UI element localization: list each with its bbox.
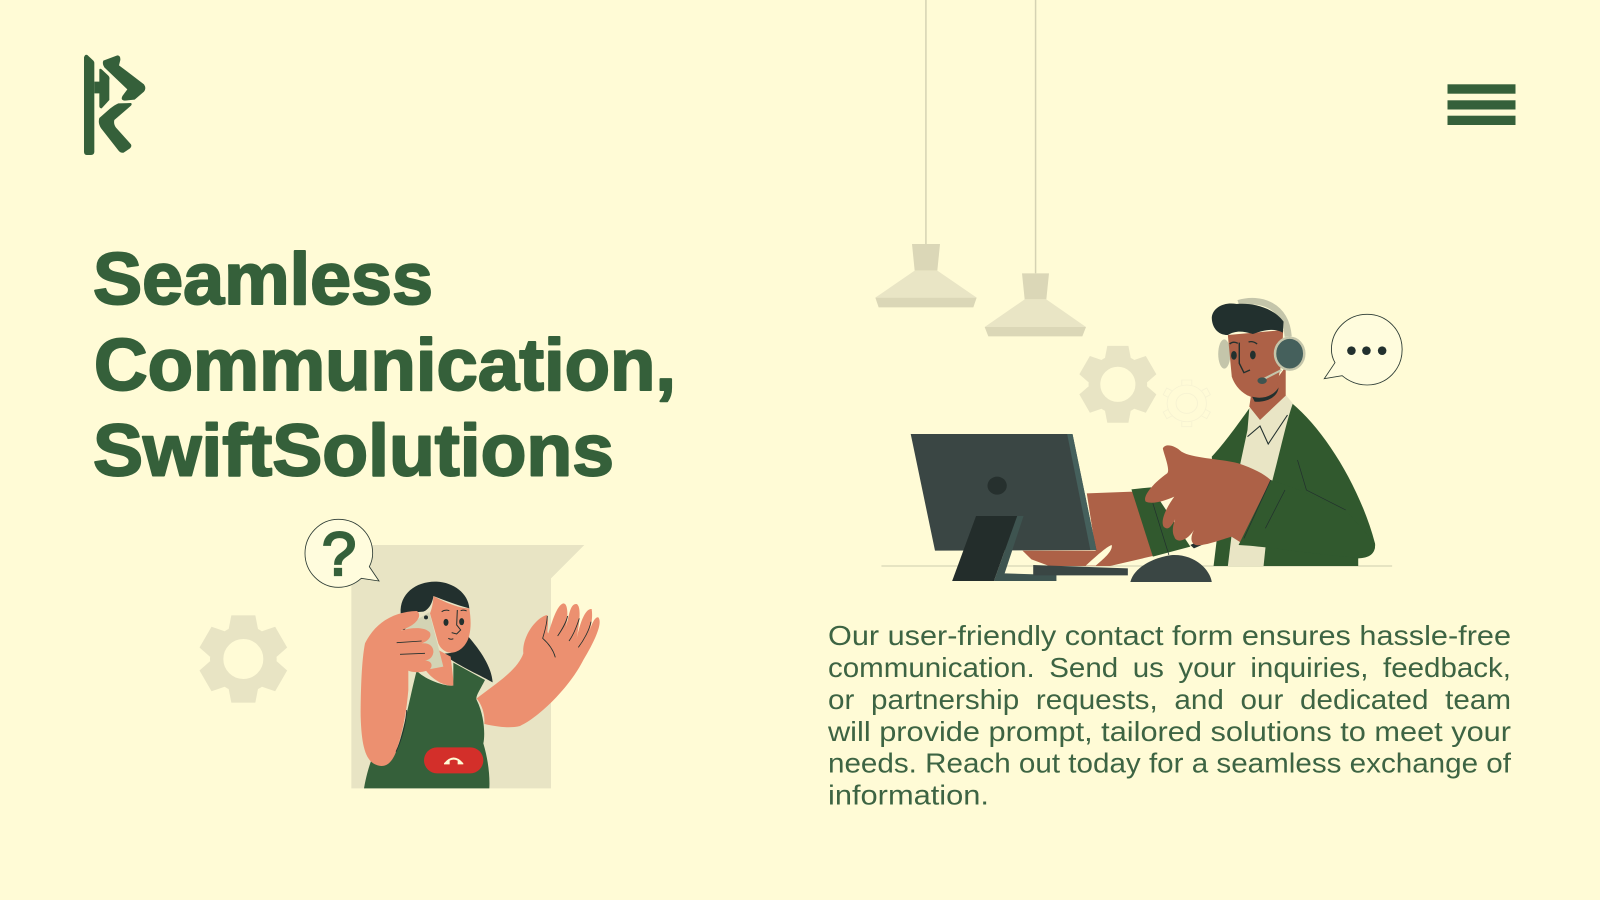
illustration: support agent at computer — [881, 301, 1402, 582]
illustration: woman on phone — [198, 519, 600, 788]
face details — [442, 610, 467, 639]
window panel — [351, 545, 584, 788]
near arm and hand — [1145, 445, 1271, 545]
collar lines — [1247, 415, 1287, 444]
title: SwiftSolutions — [93, 410, 614, 492]
speech bubble with question mark: ? — [322, 520, 356, 589]
finger lines — [396, 641, 425, 752]
title: Seamless — [93, 239, 433, 320]
woman hair — [401, 582, 469, 613]
palm lines — [543, 616, 591, 657]
woman face — [430, 596, 471, 653]
mouse — [1130, 555, 1212, 582]
headset band — [1239, 301, 1288, 337]
monitor stand — [952, 516, 1056, 581]
woman dress — [364, 663, 489, 788]
body text — [827, 620, 1511, 810]
woman left arm and hand — [361, 611, 433, 766]
woman hair back — [442, 637, 493, 682]
lamp left — [875, 0, 977, 307]
body text: communication. Send us your inquiries, feedback, — [828, 652, 1511, 683]
body text: information. — [828, 780, 989, 810]
agent hair — [1212, 303, 1284, 335]
logo — [84, 55, 145, 155]
face details — [1230, 342, 1257, 373]
title: Communication, — [94, 325, 676, 406]
title — [93, 239, 676, 492]
monitor — [911, 434, 1096, 551]
agent head — [1228, 330, 1283, 398]
pendant lamps — [875, 0, 1086, 336]
desk line — [881, 565, 1392, 567]
lamp right — [985, 0, 1086, 336]
jacket fold lines — [1153, 460, 1346, 555]
woman neck — [423, 650, 454, 686]
green cuff — [1131, 487, 1190, 557]
faint outlined gear — [1163, 380, 1210, 427]
hand shadow — [1190, 532, 1219, 548]
body text: or partnership requests, and our dedicated team — [828, 684, 1511, 715]
keyboard — [1033, 565, 1128, 575]
body text: needs. Reach out today for a seamless exchange of — [828, 748, 1511, 778]
body text: Our user-friendly contact form ensures hassle-free — [828, 620, 1511, 651]
agent neck — [1249, 367, 1286, 420]
far arm and typing hand — [1022, 492, 1153, 566]
agent shirt — [1228, 395, 1293, 566]
left ear cup — [1218, 339, 1230, 369]
large gear — [1078, 346, 1158, 423]
icon: gear — [198, 615, 288, 703]
speech bubble with dots — [1324, 314, 1402, 385]
agent jacket — [1212, 403, 1375, 566]
red hang-up button — [424, 747, 483, 773]
menu icon — [1448, 84, 1516, 125]
woman phone — [402, 612, 443, 672]
woman right arm and hand — [477, 603, 600, 727]
speech bubble with question mark — [305, 519, 379, 589]
chin shadow — [1252, 387, 1279, 402]
jacket sleeve — [1239, 480, 1375, 558]
body text: will provide prompt, tailored solutions to meet your — [827, 716, 1511, 747]
headset ear cup and mic — [1257, 338, 1304, 384]
